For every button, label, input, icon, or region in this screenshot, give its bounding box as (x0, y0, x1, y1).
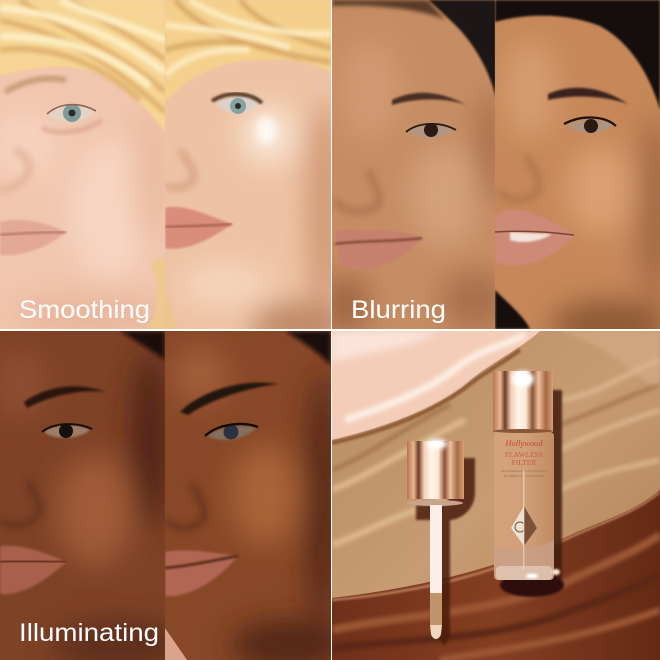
eye (216, 97, 260, 113)
lips (165, 550, 238, 596)
bottle (493, 371, 560, 580)
panel: illuminating after (165, 331, 331, 660)
label: Illuminating: Illuminating (19, 619, 159, 647)
applicator cap (407, 441, 464, 499)
bottle: FLAWLESS (505, 450, 543, 459)
bottle body (494, 432, 554, 580)
panel: blurring after (495, 0, 660, 350)
shoulder sliver (165, 628, 187, 660)
bottle diamond logo (511, 506, 537, 546)
bottle: BLURRING & ILLUMINATING (504, 474, 545, 478)
jaw background (495, 290, 530, 329)
panel: smoothing before (0, 0, 170, 337)
eye (568, 120, 613, 133)
eye (48, 106, 95, 122)
hair (285, 331, 331, 365)
hair (0, 0, 165, 132)
lips (335, 229, 422, 269)
applicator wand (430, 505, 442, 593)
lips (0, 220, 66, 255)
eye (208, 426, 256, 440)
hair (428, 0, 496, 98)
label: Smoothing: Smoothing (19, 296, 150, 324)
applicator (407, 439, 464, 639)
hair (120, 331, 165, 360)
eye (44, 425, 90, 438)
swatch: upper tan ridges (569, 331, 660, 386)
brow (548, 88, 628, 104)
panel: smoothing after (165, 0, 331, 329)
nose (334, 170, 379, 212)
applicator shadow (416, 458, 475, 646)
brow (24, 386, 106, 408)
label: Blurring: Blurring (351, 296, 446, 324)
hair (165, 0, 331, 102)
bottle shadow (540, 390, 562, 580)
bottle cap (493, 371, 553, 432)
nose (165, 484, 204, 528)
brow (392, 93, 466, 105)
bottle: FILTER (512, 458, 536, 467)
panel: blurring before (332, 0, 495, 329)
brow (180, 383, 278, 415)
bottle: SKIN-ENHANCING FOUNDATION (501, 469, 547, 473)
panel: illuminating before (0, 331, 165, 660)
nose (498, 155, 539, 200)
nose (0, 480, 40, 525)
hair (495, 0, 660, 110)
lips (0, 546, 66, 594)
nose (0, 150, 30, 190)
bottle label: Hollywood (504, 438, 543, 448)
applicator tip (430, 625, 442, 639)
panel: product on swatches (332, 331, 660, 660)
nose (165, 150, 194, 188)
swatch: pink (332, 331, 540, 440)
brow (5, 78, 66, 92)
lips (495, 210, 574, 265)
swatch: brown (332, 490, 660, 660)
lips (165, 207, 232, 249)
eye (408, 125, 454, 138)
